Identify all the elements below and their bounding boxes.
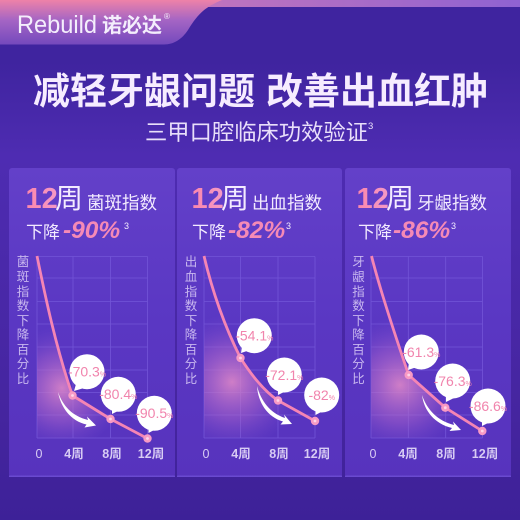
top header band	[0, 0, 520, 44]
callout: -72.1%	[265, 358, 303, 395]
x axis labels: 0	[203, 447, 210, 461]
x axis labels: 12周	[472, 447, 498, 461]
y axis label: 降	[185, 328, 198, 342]
callout: -72.1%: -72.1%	[265, 367, 303, 383]
panel: 牙龈指数	[345, 168, 511, 477]
x axis labels	[36, 447, 164, 461]
y axis label: 牙	[352, 255, 365, 269]
y axis label: 龈	[352, 270, 365, 284]
x axis labels: 12周	[304, 447, 330, 461]
line chart: 出血指数	[204, 256, 339, 438]
callout: -76.3%: -76.3%	[434, 373, 472, 389]
y axis label: 分	[352, 357, 365, 371]
heading: 12周 出血指数: 3	[286, 221, 291, 231]
callout: -70.3%	[68, 354, 106, 391]
y axis label: 出	[185, 255, 197, 269]
panel: 菌斑指数	[9, 168, 175, 477]
y axis label: 比	[17, 372, 29, 386]
x axis labels: 4周	[398, 447, 418, 461]
heading: 12周 菌斑指数	[26, 183, 157, 244]
x axis labels: 12周	[138, 447, 164, 461]
callout: -76.3%	[434, 364, 472, 402]
y axis label: 斑	[17, 270, 29, 284]
callout: -82%	[304, 378, 339, 415]
heading: 12周 牙龈指数: 牙龈指数	[417, 193, 487, 213]
heading: 12周 牙龈指数: 12	[356, 183, 389, 215]
heading: 12周 菌斑指数: 菌斑指数	[87, 193, 157, 213]
y axis label: 血	[185, 270, 197, 284]
subtitle: 3	[368, 121, 373, 132]
x axis labels: 0	[370, 447, 377, 461]
callout: -80.4%	[99, 377, 137, 414]
x axis labels	[370, 447, 498, 461]
y axis label: 数	[17, 298, 30, 313]
heading: 12周 出血指数	[192, 183, 322, 244]
callout: -86.6%	[469, 388, 507, 426]
arrow	[58, 392, 96, 428]
heading: 12周 菌斑指数: 3	[124, 221, 129, 231]
callout: -54.1%	[235, 318, 273, 353]
y axis label: 数	[185, 298, 198, 313]
heading: 12周 菌斑指数: 12	[26, 183, 58, 215]
y axis label: 百	[17, 343, 29, 357]
x axis labels: 4周	[231, 447, 251, 461]
logo: Rebuild 诺必达: ®	[164, 12, 170, 21]
subtitle: 三甲口腔临床功效验证	[145, 120, 368, 145]
y axis label: 分	[185, 357, 197, 371]
y axis label: 数	[352, 298, 365, 313]
y axis label	[352, 255, 365, 386]
y axis label: 百	[185, 343, 197, 357]
heading: 12周 出血指数: 出血指数	[252, 193, 322, 213]
y axis label: 指	[17, 284, 29, 299]
heading: 12周 牙龈指数: 3	[451, 221, 456, 231]
x axis labels: 0	[36, 447, 43, 461]
callout: -82%: -82%	[308, 387, 335, 403]
title	[33, 71, 488, 112]
title: 减轻牙龈问题	[33, 71, 255, 112]
heading: 12周 菌斑指数: -90%	[63, 217, 120, 244]
heading: 12周 出血指数: 周	[221, 183, 249, 214]
y axis label: 百	[352, 343, 365, 357]
y axis label: 下	[17, 314, 29, 328]
y axis label: 菌	[17, 255, 29, 269]
line chart: 菌斑指数	[37, 256, 173, 443]
y axis label: 比	[352, 372, 365, 386]
arrow	[257, 386, 292, 424]
callout: -61.3%	[402, 334, 440, 370]
title: 改善出血红肿	[266, 71, 488, 112]
heading: 12周 牙龈指数: -86%	[393, 217, 450, 244]
y axis label: 下	[352, 314, 365, 328]
x axis labels: 4周	[64, 447, 84, 461]
panel: 出血指数	[177, 168, 342, 477]
heading: 12周 出血指数: 12	[192, 183, 224, 215]
callout: -90.5%	[135, 396, 173, 433]
x axis labels: 8周	[436, 447, 456, 461]
y axis label: 下	[185, 314, 197, 328]
callout: -80.4%: -80.4%	[99, 386, 137, 402]
logo: Rebuild 诺必达	[17, 11, 170, 39]
y axis label: 比	[185, 372, 197, 386]
x axis labels	[203, 447, 330, 461]
heading: 12周 牙龈指数: 周	[386, 183, 414, 214]
heading: 12周 出血指数: -82%	[228, 217, 285, 244]
y axis label: 降	[352, 328, 365, 342]
heading: 12周 牙龈指数: 下降	[358, 223, 392, 242]
heading: 12周 菌斑指数: 下降	[26, 223, 60, 242]
y axis label	[17, 255, 30, 386]
heading: 12周 牙龈指数	[356, 183, 487, 244]
logo: Rebuild 诺必达: Rebuild	[17, 11, 97, 39]
callout: -70.3%: -70.3%	[68, 364, 106, 380]
y axis label: 降	[17, 328, 30, 342]
callout: -54.1%: -54.1%	[235, 328, 273, 344]
heading: 12周 菌斑指数: 周	[55, 183, 83, 214]
line chart: 牙龈指数	[371, 256, 507, 438]
heading: 12周 出血指数: 下降	[192, 223, 226, 242]
y axis label	[185, 255, 198, 386]
x axis labels: 8周	[102, 447, 122, 461]
callout: -61.3%: -61.3%	[402, 344, 440, 360]
logo: Rebuild 诺必达: 诺必达	[102, 14, 162, 37]
arrow	[422, 395, 461, 431]
y axis label: 指	[185, 284, 197, 299]
y axis label: 指	[352, 284, 365, 299]
callout: -90.5%: -90.5%	[135, 405, 173, 421]
callout: -86.6%: -86.6%	[469, 398, 507, 414]
y axis label: 分	[17, 357, 29, 371]
x axis labels: 8周	[269, 447, 289, 461]
